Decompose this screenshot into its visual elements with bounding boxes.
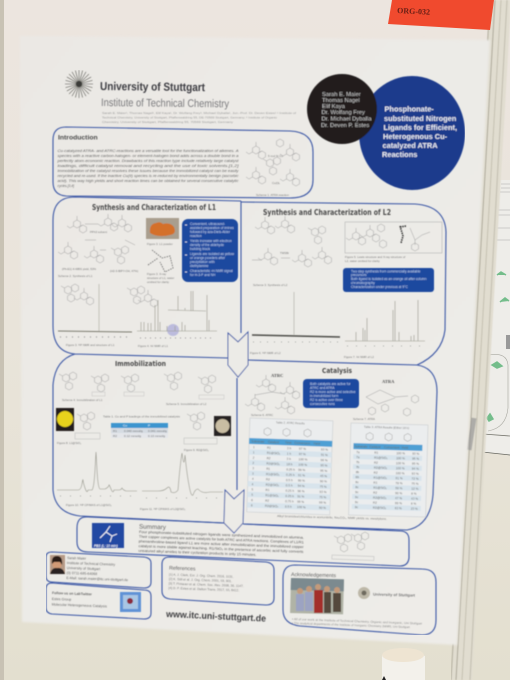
table 2: ATRC results: R1@SiO₂	[266, 472, 280, 477]
chart: 31P CP/MAS of L1@SiO2	[57, 452, 137, 507]
blue callout: L1 notes: assisted preparation of imines	[190, 226, 234, 230]
blue title circle: Reactions	[382, 150, 417, 159]
photo: yellow L1@SiO2	[56, 408, 74, 431]
table 2: ATRC results: R2@SiO₂	[266, 462, 281, 466]
summary body: Their copper complexes are active catalysts for both ATRC and ATRA reactions. Complexes of L1/R1	[139, 535, 304, 544]
table 3: ATRA results: 47 %	[395, 496, 402, 500]
table 3: ATRA results: R1@SiO₂	[373, 486, 388, 490]
figure caption: crystal structure: structure of L1, water	[147, 276, 174, 280]
introduction body text: Cu-catalyzed ATRA- and ATRC-reactions are a versatile tool for the functionalization of alkenes. A	[58, 149, 239, 153]
table 2: ATRC results: R2@SiO₂	[266, 483, 280, 487]
blue title circle: catalyzed ATRA	[382, 141, 438, 150]
table 3: ATRA results: 8 %	[411, 502, 417, 506]
table 2: ATRC results: R1	[265, 488, 270, 492]
black author circle: Dr. Wolfang Frey	[322, 110, 365, 116]
University of Stuttgart logo: University of Stuttgart	[373, 593, 416, 598]
blue callout: L1 notes	[182, 219, 238, 282]
chart: 1H NMR of L2: Figure 7. ¹H NMR of L2	[344, 355, 374, 359]
table 2: ATRC results: 2	[253, 456, 255, 460]
panel: synthesis L2 and catalysis frame lines	[241, 202, 446, 530]
blue callout: L1 notes: building block	[190, 247, 210, 251]
header: affiliations: Chemistry, University of Stuttgart, Pfaffenwaldring 55, 70569 Stuttgart, Germany	[102, 120, 234, 124]
figure caption: L2 structure	[345, 255, 405, 263]
table 3: ATRA results: 7a	[356, 455, 360, 459]
blue callout: catalysis notes	[303, 379, 359, 408]
panel: catalysis	[245, 367, 428, 521]
blue callout: L1 notes: for H-3-P and NH	[190, 273, 216, 277]
blue callout: catalysis notes: R2 is active over three	[310, 398, 343, 402]
table 3: ATRA results: 9c	[355, 500, 359, 504]
table 3: ATRA results: R2@SiO₂	[373, 506, 387, 510]
blue title circle: substituted Nitrogen	[384, 114, 457, 123]
table 2: ATRC results: R2	[266, 477, 270, 482]
references list: [3] T. Pintauer et al. Chem. Soc. Rev. 2008, 36, 1147.	[169, 581, 244, 588]
table 2: ATRC results	[247, 418, 333, 515]
ATRC scheme	[245, 375, 300, 417]
table 3: ATRA results: R2	[373, 501, 377, 505]
summary body: unsatured alkyl amides to their cyclization products in only 15 minutes.	[138, 549, 256, 557]
panel: follow us	[46, 583, 151, 619]
red tag ORG-032: ORG-032	[397, 6, 430, 17]
references heading: References	[169, 566, 196, 572]
table 1: loadings: 0.040 mmol/g	[124, 429, 143, 433]
contact text	[66, 556, 129, 582]
scheme 2: synthesis of L1: PPh3 solvent	[90, 230, 107, 234]
blue callout: L1 notes: followed by aza-Diels-Alder	[190, 230, 231, 234]
introduction body text: species with a reactive carbon-halogen- or element-halogen bond adds across a double bond in a	[58, 154, 239, 158]
panel: synthesis L1, immobilization frame lines	[53, 197, 241, 523]
scheme 4: immobilization of L1: Scheme 4. Immobilization of L1	[62, 398, 103, 402]
blue title circle: Heterogenous Cu-	[383, 132, 448, 141]
scheme 5: immobilization of L2	[164, 372, 224, 406]
blue title circle	[359, 76, 465, 190]
contact text: Sarah Maier	[67, 556, 87, 561]
table 3: ATRA results: 95 %	[412, 457, 419, 461]
blue callout: L1 notes: density of the aldehyde	[190, 243, 224, 247]
header: affiliations: Technical Chemistry, University of Stuttgart, Pfaffenwaldring 55, DE-70569 Stuttgart, Germany; ² Institute of Organic	[102, 116, 278, 120]
table 2: ATRC results: 0.5 h	[285, 505, 292, 509]
scheme 3: synthesis of L2	[252, 216, 332, 287]
table 3: ATRA results: R2	[374, 471, 378, 475]
table 3: ATRA results: R1@SiO₂	[374, 476, 388, 480]
University of Stuttgart logo	[358, 587, 416, 599]
header: university logo	[65, 70, 93, 98]
blue callout: L2 notes: Two step synthesis from commercially available	[351, 270, 421, 274]
scheme 4: immobilization of L1	[59, 372, 144, 402]
table 3: ATRA results: 94 %	[412, 467, 419, 471]
panel: synthesis and characterization of L2	[250, 208, 442, 359]
neighbouring poster on the right	[482, 180, 510, 455]
table 3: ATRA results: 100 %	[396, 461, 405, 465]
table 1: loadings	[103, 414, 181, 438]
introduction body text	[56, 149, 240, 188]
structure: L2@SiO2: Figure 9. R2@SiO₂	[184, 448, 209, 452]
table 3: ATRA results: 8 %	[411, 492, 417, 496]
table 2: ATRC results: 0.25 h	[286, 473, 295, 477]
references list: [1] A. J. Clark, Eur. J. Org. Chem. 2016, 1131.	[169, 573, 234, 579]
table 2: ATRC results: 3	[252, 466, 254, 470]
table 3: ATRA results: 100 %	[396, 456, 405, 460]
panel: references	[162, 557, 274, 605]
table 2: ATRC results: R2	[265, 499, 269, 503]
table 3: ATRA results: 72 %	[412, 477, 419, 481]
summary scheme	[332, 532, 374, 560]
ATRC scheme: Scheme 6. ATRC	[251, 413, 273, 417]
table 3: ATRA results: 43 %	[411, 497, 418, 501]
table 3: ATRA results: R1@SiO₂	[374, 456, 388, 460]
table 3: ATRA results: 91 %	[396, 476, 403, 480]
table 2: ATRC results: 3	[252, 472, 254, 476]
table 3: ATRA results: 8c	[355, 480, 359, 484]
table 3: ATRA results: 63 %	[395, 506, 402, 510]
table 2: ATRC results: 4	[252, 482, 254, 486]
blue callout: L1 notes: or orange powders after	[190, 256, 226, 260]
panel: immobilization	[56, 360, 231, 511]
flow arrow: L1/L2 to immobilization/catalysis	[228, 332, 248, 377]
table 1: loadings: 0.041 mmol/g	[148, 429, 167, 433]
QR code	[120, 592, 141, 612]
table 3: ATRA results: 93 %	[412, 472, 419, 476]
figure: L2 Lewis structure and crystal structure	[345, 222, 442, 253]
website URL: www.itc.uni-stuttgart.de	[165, 609, 266, 624]
chart: 31P NMR of L1: Figure 3. ³¹P NMR and structure of L1	[66, 343, 115, 347]
table 3: ATRA results: R2@SiO₂	[373, 496, 387, 500]
introduction body text: perfectly atom-economic reaction. Drawbacks of this reaction type include relatively large catalyst	[56, 159, 240, 163]
scheme 3: synthesis of L2: Scheme 3. Synthesis of L2	[253, 283, 288, 287]
header: institute name: Institute of Technical Chemistry	[101, 97, 230, 110]
table 2: ATRC results: 5	[251, 493, 253, 497]
table 2: ATRC results: 93 %	[321, 447, 328, 452]
table 2: ATRC results: 99 %	[297, 500, 304, 504]
table 2: ATRC results: 75 %	[319, 495, 327, 499]
table 2: ATRC results: 4	[252, 477, 254, 481]
ATRA scheme: Scheme 7. ATRA	[353, 417, 375, 421]
black author circle: Dr. Deven P. Estes	[321, 123, 369, 129]
summary body: phenanthroline-based ligand L1 are more active after immobilization and the immobilized copper	[139, 539, 305, 549]
chart: 31P NMR of L2	[250, 292, 340, 355]
ATRA scheme	[353, 390, 418, 421]
table 3: ATRA results: 12 %	[411, 487, 419, 491]
table 2: ATRC results: 2	[252, 461, 254, 465]
table 2: ATRC results: 90 %	[320, 479, 327, 484]
chart: 1H NMR of L2	[344, 300, 425, 359]
acknowledgements heading: Acknowledgements	[291, 572, 336, 579]
summary image: blue square with molecule	[92, 523, 124, 548]
introduction body text: recycled and re-used. If the inactive Cu(II) species is re-reduced by environmentally benign (ascorbic	[58, 174, 239, 178]
table 2: ATRC results: 5	[251, 487, 254, 492]
table 2: ATRC results: 1	[253, 445, 255, 449]
blue title circle: Phosphonate-	[384, 104, 434, 114]
figure caption: L2 structure: L2, water omitted for clarity	[345, 259, 380, 263]
table 2: ATRC results: 0.25 h	[286, 467, 295, 472]
table 2: ATRC results: 45 %	[320, 474, 327, 478]
catalysis heading: Catalysis	[322, 367, 352, 375]
table 2: ATRC results: 18 h	[286, 462, 293, 466]
blue callout: L2 notes: Characterization under previous at 9°C	[351, 285, 408, 289]
table 3: ATRA results: R1	[373, 481, 378, 485]
introduction body text: acid). This way high yields and short reaction times can be obtained for several consecutive catalytic	[58, 179, 239, 183]
table 1: loadings: 0.12 mmol/g	[124, 434, 141, 438]
table 2: ATRC results: 6	[251, 503, 253, 507]
table 2: ATRC results: 1	[253, 450, 255, 454]
header: affiliations: Sarah E. Maier¹, Thomas Nagel¹, Elif Kaya¹, Dr. Wolfang Frey², Michael Dyballa¹, Jun.-Prof. Dr. Deven Estes¹ ¹ Institute of	[102, 111, 296, 115]
portrait photo	[50, 555, 65, 574]
table 2: ATRC results: 96 %	[297, 489, 305, 493]
table 3: ATRA results: 7b	[356, 465, 360, 469]
table 2: ATRC results: Substrate Catalyst Time Conversion Yield	[251, 439, 320, 446]
blue callout: L2 notes	[343, 268, 434, 292]
structure: L1@SiO2: Figure 8. L1@SiO₂	[57, 441, 81, 445]
immobilization heading: Immobilization	[115, 360, 166, 368]
table 2: ATRC results: 95 %	[320, 469, 328, 473]
table 3: ATRA results: 90 %	[395, 491, 403, 495]
introduction body text: Immobilization of the catalyst resolves these issues because the immobilized catalyst can be easily	[58, 169, 239, 173]
acknowledgement notes: • The analytical departments of the Institute of Inorganic Chemistry (NMR), Uni Stuttgart	[292, 621, 410, 629]
table 2: ATRC results: 0.25 h	[285, 494, 294, 498]
table 2: ATRC results: 97 %	[299, 447, 306, 451]
blue callout: L1 notes: Ligands are isolated as yellow	[190, 252, 235, 256]
contact text: E-Mail: sarah.maier@itc.uni-stuttgart.de	[66, 576, 128, 582]
panel: introduction	[53, 127, 313, 198]
introduction heading: Introduction	[58, 134, 98, 142]
blue callout: L1 notes: reaction	[190, 234, 202, 238]
table 2: ATRC results: R1@SiO₂	[265, 493, 280, 498]
contact text: Institute of Technical Chemistry	[67, 561, 115, 567]
scheme 2: synthesis of L1: (H2-3-BIPY-OH, 47%)	[110, 269, 138, 273]
table 3: ATRA results: R2@SiO₂	[374, 466, 388, 470]
blue callout: L1 notes: diethylamine	[190, 264, 209, 268]
photo: beige L2@SiO2	[214, 416, 231, 436]
table 3: ATRA results: 100 %	[396, 451, 405, 455]
table 2: ATRC results: 97 %	[299, 452, 306, 456]
scheme 1: ATRA reaction	[246, 139, 300, 197]
table 2: ATRC results: R1	[267, 446, 271, 450]
scheme 1: ATRA reaction: 5 mol % Cu	[268, 154, 283, 158]
summary image: blue square with molecule: PBS (L: 10 min)	[94, 544, 118, 548]
scheme 3: synthesis of L2: TMSBr	[280, 251, 289, 255]
table 2: ATRC results: Table 2. ATRC Results	[276, 420, 305, 425]
chart: 31P NMR of L2: Figure 6. ³¹P NMR of L2	[250, 351, 281, 355]
blue callout: catalysis notes: in immobilized form	[310, 394, 339, 398]
scheme 2: synthesis of L1: Scheme 2. Synthesis of L1	[58, 274, 93, 278]
introduction body text: cycles.[3,4]	[58, 184, 74, 188]
follow us text: Estes Group	[52, 597, 71, 602]
table 2: ATRC results: 95 %	[320, 463, 328, 468]
table 2: ATRC results: 0.5 h	[286, 478, 293, 482]
structure: L2@SiO2	[184, 412, 217, 452]
L1 heading: Synthesis and Characterization of L1	[92, 203, 216, 212]
header: affiliations	[102, 111, 296, 124]
black author circle: Elif Kaya	[322, 104, 346, 110]
table 2: ATRC results: 100 %	[298, 463, 307, 467]
table 2: ATRC results: 3 h	[287, 457, 291, 461]
table 3: ATRA results	[349, 423, 428, 517]
panel: acknowledgements	[283, 565, 436, 635]
follow us text: Follow us on LabTwitter	[52, 591, 93, 596]
table 3: ATRA results: 99 %	[395, 501, 402, 505]
table 2: ATRC results: 0.25 h	[285, 489, 294, 493]
scheme 2: synthesis of L1	[58, 214, 138, 278]
table 3: ATRA results: 8b	[356, 470, 359, 474]
table 3: ATRA results: Table 3. ATRA Results (Either 18 h)	[364, 425, 409, 430]
summary body: Four phosphonate-substituted nitrogen ligands were synthesized and immobilized on alumina.	[139, 530, 304, 540]
summary heading: Summary	[139, 524, 167, 531]
chart: 31P NMR of L1	[58, 284, 132, 347]
crystal structure of L1	[148, 250, 173, 272]
references list: [2] K. Still et al. J. Org. Chem. 2001, 59, 901.	[169, 577, 232, 583]
table 2: ATRC results: R1	[266, 467, 271, 471]
table 2: ATRC results: 0.5 h	[286, 483, 293, 488]
blue callout: L2 notes: chromatography	[351, 281, 375, 285]
table 2: ATRC results: 0.75 h	[285, 499, 294, 504]
table 3: ATRA results: 9c	[355, 495, 359, 499]
black author circle: Sarah E. Maier	[322, 92, 361, 98]
blue callout: catalysis notes: ATRC and ATRA	[310, 386, 335, 390]
references list: [4] D. P. Estes et al. Dalton Trans. 2017, 55, 8412.	[168, 586, 239, 592]
blue callout: L1 notes: precipitation with	[190, 260, 215, 264]
table 3: ATRA results: 59 %	[395, 486, 403, 490]
white cup on the floor	[382, 648, 425, 680]
table 3: ATRA results: 23 %	[411, 507, 418, 511]
table 2: ATRC results: 100 %	[299, 457, 308, 462]
table 2: ATRC results: 94 %	[298, 484, 305, 488]
table 2: ATRC results: 75 %	[320, 485, 327, 489]
table 2: ATRC results: R1@SiO₂	[267, 451, 281, 455]
photo: L1 powder	[146, 218, 179, 239]
table 1: loadings: Cu	[123, 424, 127, 428]
left wall frame strip	[0, 0, 4, 680]
summary body: catalyst is more stable against leaching. R1/SiO₂ in the presence of ascorbic acid fully converts	[138, 544, 304, 554]
poster stand pole	[451, 0, 510, 680]
group photo	[290, 578, 344, 614]
L2 heading: Synthesis and Characterization of L2	[263, 208, 391, 217]
table 2: ATRC results: 3 h	[287, 446, 292, 450]
table 1: loadings: R2	[113, 434, 117, 438]
table 3: ATRA results: 100 %	[396, 471, 405, 475]
table 1: loadings: Table 1. Cu and P loadings of the immobilized catalysts	[103, 414, 181, 418]
table 2: ATRC results: 96 %	[321, 458, 328, 462]
chart: 31P CP/MAS of L2@SiO2: Figure 11. ³¹P CP/MAS of L2@SiO₂	[140, 507, 185, 511]
table 3: ATRA results: 9c	[355, 490, 359, 494]
black author circle	[307, 74, 377, 144]
table footnote: Alkyl bromides/chlorides in acetonitrile, Na₂CO₃, NMR yields vs. mesitylene.	[277, 514, 387, 521]
table 3: ATRA results: 7a	[356, 450, 360, 454]
table 3: ATRA results: 7b	[356, 460, 360, 464]
blue title circle: Ligands for Efficient,	[384, 123, 457, 132]
black author circle: Dr. Michael Dyballa	[322, 116, 372, 122]
ATRC label: ATRC	[271, 373, 283, 378]
chart: 31P CP/MAS of L1@SiO2: Figure 10. ³¹P CP/MAS of L1@SiO₂	[66, 503, 112, 507]
table 3: ATRA results: 9c	[355, 505, 359, 509]
table 3: ATRA results: 75 %	[411, 482, 419, 486]
figure caption: L1 powder: Figure 3. L1 powder	[147, 242, 173, 246]
flow arrow into summary	[224, 490, 244, 533]
table 2: ATRC results: R2	[267, 456, 271, 460]
scheme 1: ATRA reaction: Scheme 1. ATRA reaction	[256, 193, 289, 197]
references list	[168, 573, 244, 593]
table 3: ATRA results: 100 %	[396, 466, 405, 470]
table 1: loadings: P	[148, 424, 150, 428]
contact text: (0) 0711-685-64068	[66, 571, 97, 576]
table 3: ATRA results: 93 %	[412, 452, 420, 456]
blue callout: L2 notes: Both ligand is isolated as an orange oil after column	[351, 277, 427, 281]
blue callout: catalysis notes: R2 is more active and selective	[310, 390, 356, 394]
figure caption: L2 structure: Figure 5. Lewis structure and X-ray structure of	[345, 255, 405, 259]
figure caption: crystal structure: omitted for clarity	[147, 280, 170, 284]
blue callout: catalysis notes: Both catalysts are active for	[310, 382, 351, 386]
table 2: ATRC results: 6	[251, 498, 253, 502]
black author circle: Thomas Nagel	[322, 98, 360, 104]
table 2: ATRC results: 99 %	[319, 500, 326, 505]
table 3: ATRA results: 8b	[356, 475, 359, 479]
table 3: ATRA results: R1	[374, 451, 379, 455]
table 1: loadings: R1	[113, 429, 117, 433]
table 3: ATRA results: R2	[374, 461, 378, 465]
table 2: ATRC results: 91 %	[297, 494, 305, 499]
follow us text: Molecular Heterogeneous Catalysis	[52, 602, 107, 608]
table 2: ATRC results: R2@SiO₂	[265, 504, 279, 508]
table 3: ATRA results: 95 %	[412, 462, 419, 466]
header: university name: University of Stuttgart	[100, 81, 205, 94]
blue callout: L1 notes: Convenient, ultrasound-	[190, 222, 225, 226]
acknowledgement notes	[292, 617, 422, 630]
panel: summary	[77, 490, 409, 566]
scheme 5: immobilization of L2: Scheme 5. Immobilization of L2	[166, 402, 207, 406]
acknowledgement notes: • All of our work at the Institute of Technical Chemistry, Organic and Inorganic, Uni Stuttgart	[292, 617, 422, 626]
chart: 31P CP/MAS of L2@SiO2	[140, 453, 223, 511]
panel: synthesis and characterization of L1	[58, 203, 238, 348]
blue callout: L1 notes: Yields increase with electron	[190, 239, 232, 243]
scheme 2: synthesis of L1: (Ph-E1) 4-WBS yield, 53%	[62, 267, 96, 271]
table 3: ATRA results: 78 %	[395, 481, 403, 485]
blue callout: L2 notes: precursors	[351, 273, 367, 277]
table 2: ATRC results: 91 %	[298, 473, 305, 477]
scheme 1: ATRA reaction: Cu(I)L	[272, 181, 280, 185]
summary body	[138, 530, 305, 559]
table 1: loadings: 0.13 mmol/g	[148, 434, 165, 438]
table 2: ATRC results: 100 %	[297, 505, 306, 509]
follow us text	[52, 591, 108, 608]
ATRA label: ATRA	[382, 379, 395, 384]
introduction body text: loadings, difficult catalyst removal and recycling and the use of toxic solvents.[1,2]	[58, 164, 239, 168]
table 3: ATRA results: 8c	[355, 485, 359, 489]
table 3: ATRA results: R2	[373, 491, 377, 495]
structure: L1@SiO2	[57, 412, 100, 445]
table 2: ATRC results: 99 %	[298, 468, 306, 472]
figure caption: crystal structure	[147, 272, 174, 284]
red tag ORG-032	[388, 0, 494, 30]
contact text: University of Stuttgart	[67, 566, 100, 571]
table 2: ATRC results: 90 %	[319, 506, 326, 510]
chart: 1H NMR of L1	[127, 286, 217, 348]
panel: contact Sarah Maier	[46, 552, 151, 588]
blue callout: L1 notes: Characteristic ¹H-NMR signal	[190, 269, 233, 273]
blue callout: catalysis notes: consecutive runs	[310, 402, 335, 406]
table 3: ATRA results: Substrate Catalyst Conversion Yield	[354, 444, 408, 450]
chart: 1H NMR of L1: Figure 4. ¹H NMR of L1	[138, 344, 168, 348]
table 2: ATRC results: 99 %	[298, 479, 305, 483]
table 2: ATRC results: 91 %	[321, 453, 328, 457]
table 2: ATRC results: 1 h	[287, 452, 291, 456]
figure caption: crystal structure: Figure 3. X-ray	[147, 272, 167, 276]
table 2: ATRC results: 93 %	[319, 490, 327, 494]
